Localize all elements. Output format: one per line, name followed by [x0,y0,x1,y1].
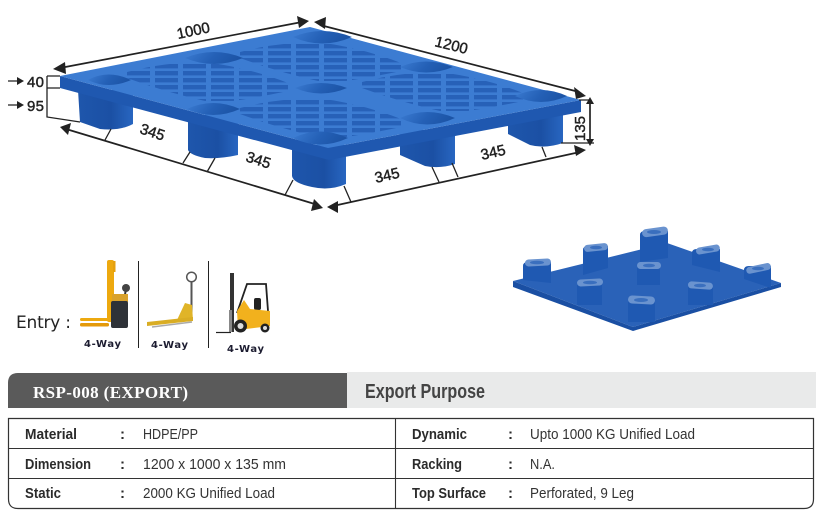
row: top surface: Perforated, 9 Leg [530,485,634,502]
dimension: 345 front left [60,121,323,211]
pallet legs [78,90,563,188]
pallet slab sides [60,76,581,160]
row: racking: : [508,456,513,473]
icon: forklift [216,273,270,332]
4-way labels: 4-Way [151,340,188,351]
dimension: 345 front left: 345 [138,121,167,145]
divider 1 [138,261,139,348]
icon: hand pallet truck [147,272,196,327]
row: dynamic [412,426,695,443]
row: static [25,485,275,502]
dimension: 40 and 95: 95 [27,98,44,115]
header left panel [8,373,347,408]
dimension: 1200 [314,17,586,99]
pallet underside view [513,226,781,331]
leg recesses [88,31,567,144]
dimension: 1200: 1200 [433,33,470,58]
row: material: HDPE/PP [143,426,198,443]
row: static: : [120,485,125,502]
entry section [16,260,270,355]
specification table [8,418,814,508]
dimension: 40 and 95: 40 [27,74,44,91]
row: dynamic: : [508,426,513,443]
table frame [8,418,814,508]
divider 2 [208,261,209,348]
dimension: 345 front right [327,142,586,213]
header right panel [347,372,816,408]
row: dimension: Dimension [25,456,91,473]
4-way labels: 4-Way [84,339,121,350]
main pallet diagram [8,16,594,213]
row: dimension: 1200 x 1000 x 135 mm [143,456,286,473]
dimension: 345 front right: 345 [373,165,401,187]
row: racking: Racking [412,456,462,473]
header band [8,372,816,408]
row: racking: N.A. [530,456,555,473]
perforated lattice [127,42,523,137]
row: dynamic: Dynamic [412,426,467,443]
row: dynamic: Upto 1000 KG Unified Load [530,426,695,443]
purpose title: Export Purpose [365,381,485,403]
dimension: 345 front right: 345 [479,142,507,164]
dimension: 40 and 95 [8,74,80,122]
underside base edge [513,281,781,331]
row: racking [412,456,555,473]
row: material [25,426,198,443]
dimension: 135 [561,97,594,146]
model title: RSP-008 (EXPORT) [33,383,188,402]
4-way labels: 4-Way [227,344,264,355]
row: top surface: Top Surface [412,485,486,502]
underside base [513,243,781,327]
row: top surface: : [508,485,513,502]
dimension: 1000 [53,16,309,74]
row: top surface [412,485,634,502]
pallet top deck [60,27,581,148]
dimension: 135: 135 [572,116,589,141]
dimension: 1000: 1000 [175,19,211,43]
row: material: : [120,426,125,443]
row: dimension [25,456,286,473]
row: dimension: : [120,456,125,473]
underside legs [523,226,772,322]
icon: electric stacker [80,260,130,328]
entry label: Entry : [16,313,71,333]
dimension: 345 front left: 345 [244,149,273,173]
row: material: Material [25,426,77,443]
row: static: Static [25,485,61,502]
row: static: 2000 KG Unified Load [143,485,275,502]
4-way labels [84,339,264,355]
